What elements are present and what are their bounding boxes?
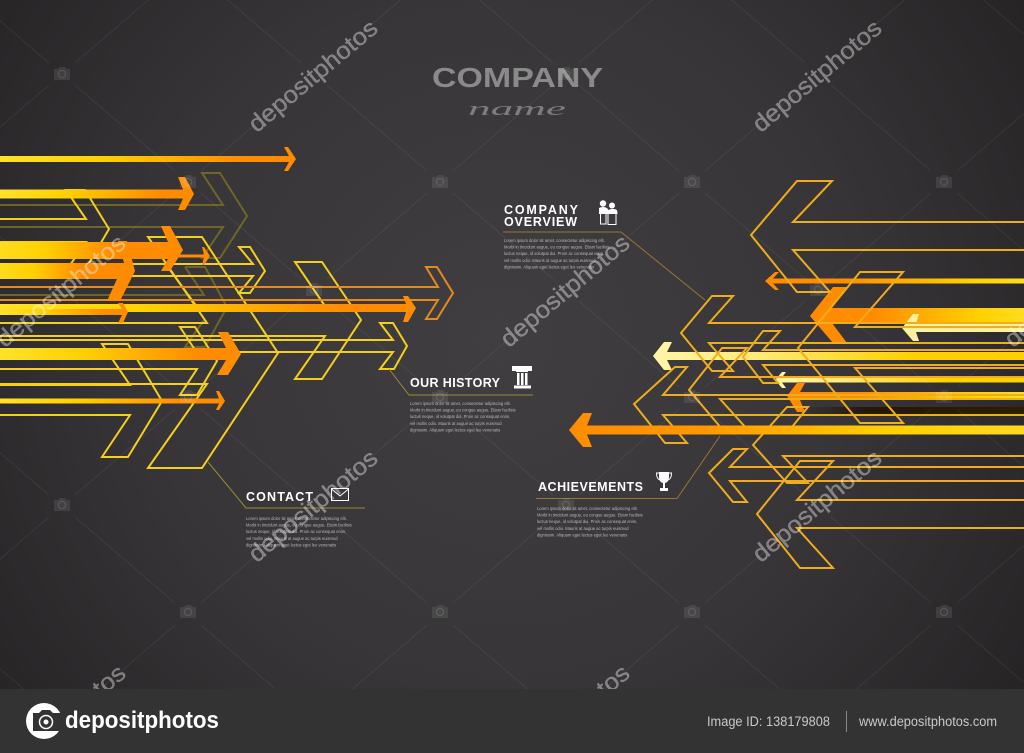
outlined arrows: olive (0, 173, 247, 347)
filled arrow 1 (0, 147, 296, 171)
divider (846, 711, 847, 732)
filled arrow R2 (810, 287, 1024, 343)
filled arrow 8 (0, 391, 225, 410)
body text: vel mollis odio. Mauris at augue ac turpis euismod (246, 536, 338, 541)
icon: trophy (656, 472, 672, 491)
title: company name (432, 62, 603, 120)
watermark text: depositphotos (243, 444, 383, 568)
footer band (0, 689, 1024, 753)
body text: Lorem ipsum dolor sit amet, consectetur adipiscing elit. (537, 506, 638, 511)
body text (504, 238, 610, 269)
heading (504, 203, 579, 229)
body text: vel mollis odio. Mauris at augue ac turpis euismod (537, 526, 629, 531)
icon: column (512, 366, 532, 388)
watermark text: depositphotos (243, 14, 383, 138)
body text: vel mollis odio. Mauris at augue ac turpis euismod (410, 421, 502, 426)
filled arrow 5 (0, 296, 416, 322)
body text: Lorem ipsum dolor sit amet, consectetur adipiscing elit. (246, 516, 347, 521)
icon: logo (26, 703, 62, 739)
filled arrow R1 (765, 272, 1024, 290)
connector line (503, 232, 705, 300)
body text: Lorem ipsum dolor sit amet, consectetur adipiscing elit. (504, 238, 605, 243)
watermark text: depositphotos (747, 14, 887, 138)
body text: luctus neque, id volutpat dui. Proin ac consequat enim, (504, 251, 604, 256)
heading: OUR HISTORY (410, 376, 501, 390)
body text (537, 506, 643, 537)
title: company name: name (468, 99, 566, 120)
title: company name: COMPANY (432, 62, 603, 93)
body text: dignissim. Aliquam eget lectus eget leo venenatis (410, 427, 500, 432)
outlined arrows: amber (634, 181, 1024, 568)
body text: Morbi in tincidunt augue, eu congue augue. Etiam facilisis (246, 523, 352, 528)
filled arrow R3 (902, 314, 1024, 341)
watermark cameras (54, 67, 952, 618)
watermark text: depositphotos (747, 444, 887, 568)
section: our history (389, 366, 533, 432)
heading: OVERVIEW (504, 215, 577, 229)
dark shadow band (800, 407, 1024, 415)
filled arrow 2 (0, 177, 194, 210)
logo wordmark: depositphotos (65, 707, 219, 734)
outlined arrows: yellow (0, 190, 407, 468)
right arrow group (569, 181, 1024, 568)
image id: Image ID: 138179808 (707, 714, 830, 729)
body text: luctus neque, id volutpat dui. Proin ac consequat enim, (246, 529, 346, 534)
body text: luctus neque, id volutpat dui. Proin ac consequat enim, (537, 519, 637, 524)
section: achievements (536, 436, 720, 537)
body text: dignissim. Aliquam eget lectus eget leo venenatis (246, 542, 336, 547)
connector line (536, 436, 720, 498)
body text (410, 401, 516, 432)
body text: dignissim. Aliquam eget lectus eget leo venenatis (537, 532, 627, 537)
filled arrow R4 (653, 342, 1024, 370)
section: contact (208, 462, 365, 547)
body text (246, 516, 352, 547)
heading: ACHIEVEMENTS (538, 480, 643, 494)
body text: Morbi in tincidunt augue, eu congue augue. Etiam facilisis (410, 408, 516, 413)
filled arrow 4 (0, 241, 135, 301)
filled arrow R7 (569, 413, 1024, 447)
small filled arrow (170, 247, 210, 265)
connector line (208, 462, 365, 508)
heading: CONTACT (246, 490, 313, 504)
icon: people (599, 200, 618, 224)
site url: www.depositphotos.com (858, 714, 997, 729)
filled arrow 7 (0, 332, 241, 375)
icon: envelope (332, 488, 348, 500)
left arrow group (0, 147, 453, 468)
body text: dignissim. Aliquam eget lectus eget leo venenatis (504, 264, 594, 269)
body text: Lorem ipsum dolor sit amet, consectetur adipiscing elit. (410, 401, 511, 406)
filled arrow R5 (775, 372, 1024, 388)
heading: COMPANY (504, 203, 579, 217)
body text: Morbi in tincidunt augue, eu congue augue. Etiam facilisis (504, 245, 610, 250)
watermark text: depositphotos (495, 229, 635, 353)
outlined arrow: orange (0, 267, 453, 319)
connector line (389, 369, 533, 395)
body text: Morbi in tincidunt augue, eu congue augue. Etiam facilisis (537, 513, 643, 518)
filled arrow 6 (0, 303, 128, 323)
body text: luctus neque, id volutpat dui. Proin ac consequat enim, (410, 414, 510, 419)
body text: vel mollis odio. Mauris at augue ac turpis euismod (504, 258, 596, 263)
filled arrow R6 (787, 383, 1024, 412)
section: company overview (503, 200, 705, 300)
filled arrow 3 (0, 226, 183, 271)
